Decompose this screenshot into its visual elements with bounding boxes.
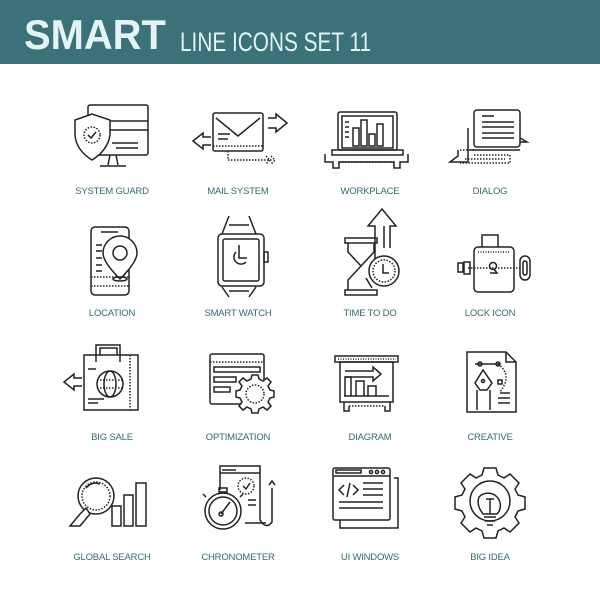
label: location: LOCATION [89,308,135,319]
title: LINE ICONS SET 11 [180,27,371,57]
icon: diagram [335,356,398,411]
icon: optimization [210,354,274,413]
label: ui windows: UI WINDOWS [341,552,399,563]
icon: global search [70,478,146,526]
label: time to do: TIME TO DO [343,308,397,319]
label: creative: CREATIVE [467,432,513,443]
label: workplace: WORKPLACE [341,186,399,197]
label: lock icon: LOCK ICON [465,308,516,319]
icon: creative [467,352,516,412]
icon: big idea [455,468,525,538]
icon: big sale [64,345,138,410]
icon: smart watch [218,216,268,297]
label: big sale: BIG SALE [91,432,133,443]
label: optimization: OPTIMIZATION [206,432,271,443]
header bar [0,0,600,64]
icon: chronometer [203,466,275,529]
icon: ui windows [333,468,398,528]
title: SMART [24,11,166,58]
icon: system guard [75,105,148,166]
label: chronometer: CHRONOMETER [201,552,275,563]
label: big idea: BIG IDEA [470,552,511,563]
icon: location [91,227,137,295]
icon: time to do [345,209,399,295]
label: diagram: DIAGRAM [349,432,392,443]
icon: lock icon [458,235,530,292]
label: global search: GLOBAL SEARCH [73,552,151,563]
icon: mail system [193,113,287,164]
icon: workplace [325,112,408,168]
label: dialog: DIALOG [473,186,507,197]
label: mail system: MAIL SYSTEM [207,186,269,197]
title [24,11,371,58]
icon: dialog [450,110,527,163]
label: system guard: SYSTEM GUARD [75,186,149,197]
label: smart watch: SMART WATCH [204,308,272,319]
